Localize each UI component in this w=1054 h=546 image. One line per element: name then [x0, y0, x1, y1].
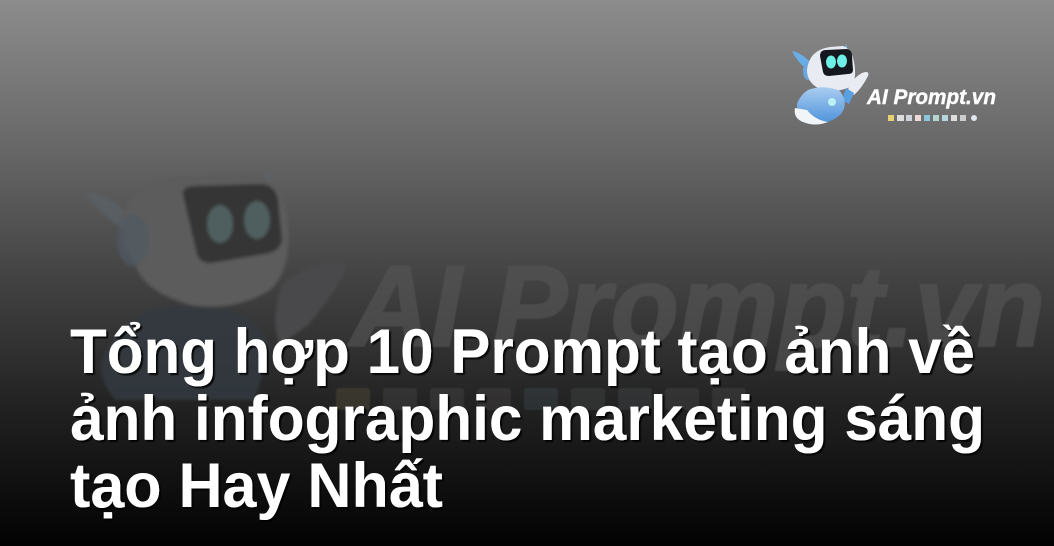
eyes: [826, 56, 836, 68]
watermark: icon row: [336, 388, 746, 410]
title line 2: ảnh infographic marketing sáng: [70, 384, 985, 454]
face screen: [820, 49, 853, 76]
title: [70, 317, 985, 521]
torso: [797, 87, 845, 123]
logo: robot mascot: [792, 44, 868, 124]
side ear: [803, 62, 813, 80]
lower body: [795, 108, 828, 124]
watermark: large brand text: AI Prompt.vn: [347, 243, 1045, 371]
logo: brand name: AI Prompt.vn: [866, 86, 996, 109]
chest light: [828, 98, 836, 106]
right antenna: [842, 44, 851, 60]
logo: small icon row: [888, 115, 977, 121]
watermark: large robot: [85, 170, 345, 400]
raised arm: [848, 72, 868, 95]
title line 3: tạo Hay Nhất: [70, 451, 443, 521]
head: [807, 46, 855, 91]
title line 1: Tổng hợp 10 Prompt tạo ảnh về: [70, 317, 975, 387]
left antenna: [792, 51, 811, 70]
